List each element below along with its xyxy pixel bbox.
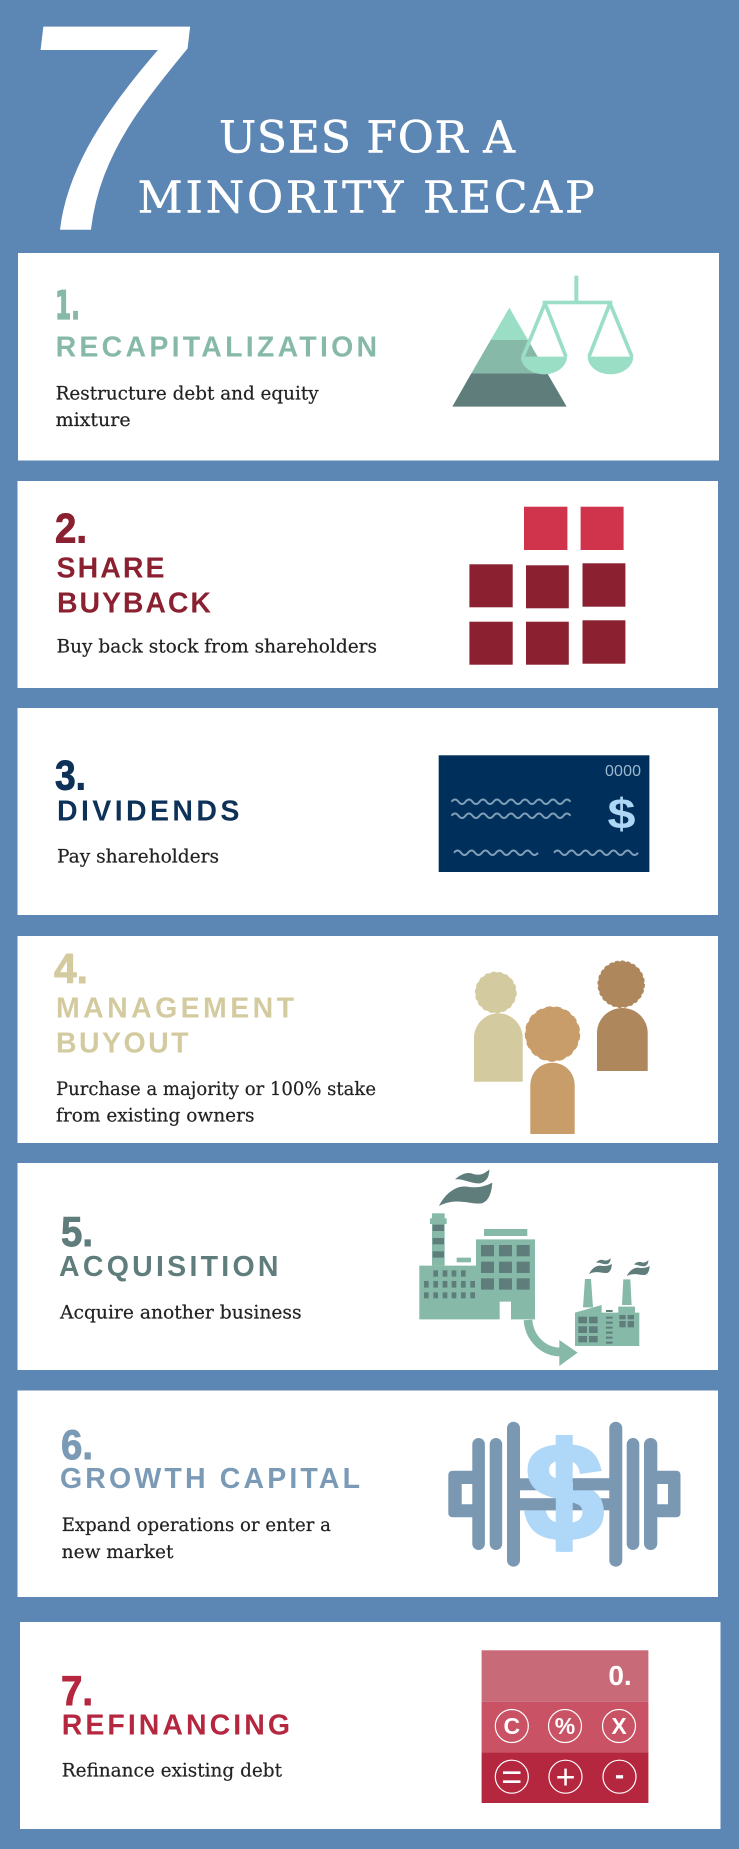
heading — [56, 552, 211, 620]
description: Acquire another business — [59, 1302, 302, 1323]
description: Refinance existing debt — [62, 1761, 283, 1782]
heading: BUYOUT — [56, 1028, 189, 1060]
icon: calculator: - — [615, 1759, 624, 1790]
icon: cheque: $ — [608, 790, 636, 838]
icon: calculator: X — [611, 1713, 627, 1739]
heading — [56, 993, 295, 1060]
description: Restructure debt and equity — [56, 383, 319, 404]
title block — [0, 0, 595, 292]
icon: cheque: 0000 — [605, 763, 641, 780]
heading: BUYBACK — [57, 588, 211, 620]
number 5: 5. — [61, 1208, 93, 1255]
icon: calculator — [482, 1650, 648, 1803]
title line 1: USES FOR A — [219, 112, 516, 163]
heading: ACQUISITION — [59, 1251, 278, 1283]
icon: pyramid and balance scale — [452, 276, 633, 407]
number 6: 6. — [61, 1421, 93, 1468]
description: Purchase a majority or 100% stake — [56, 1079, 376, 1100]
icon: calculator: + — [556, 1759, 575, 1797]
icon: cheque — [439, 755, 649, 872]
description: Expand operations or enter a — [62, 1515, 331, 1536]
icon: share blocks — [469, 507, 625, 665]
icon: calculator: = — [501, 1756, 522, 1797]
icon: calculator: C — [503, 1713, 520, 1739]
number 2: 2. — [55, 505, 87, 552]
description: Pay shareholders — [57, 847, 219, 868]
panel 2: share buyback — [18, 481, 718, 688]
heading: RECAPITALIZATION — [56, 332, 377, 364]
heading: REFINANCING — [62, 1709, 290, 1741]
panel 6: growth capital — [18, 1390, 718, 1597]
icon: three people — [474, 961, 648, 1134]
panel 1: recapitalization — [18, 253, 719, 460]
heading: DIVIDENDS — [57, 796, 239, 828]
heading: MANAGEMENT — [56, 993, 295, 1025]
number 7: 7. — [61, 1667, 93, 1714]
panel 5: acquisition — [18, 1163, 718, 1370]
description — [62, 1515, 331, 1563]
description: Buy back stock from shareholders — [56, 637, 377, 658]
icon: calculator: % — [555, 1713, 575, 1739]
icon: dumbbell with dollar sign: $ — [524, 1416, 604, 1570]
description: new market — [62, 1542, 174, 1563]
heading: SHARE — [56, 552, 164, 584]
description — [56, 1079, 376, 1127]
number 1: 1. — [55, 283, 80, 329]
panel 4: management buyout — [18, 936, 718, 1143]
title line 2: MINORITY RECAP — [138, 173, 595, 224]
icon: dumbbell with dollar sign — [448, 1416, 680, 1570]
icon: large factory, arrow and small factory — [419, 1169, 650, 1366]
heading: GROWTH CAPITAL — [60, 1463, 360, 1495]
number 4: 4. — [54, 945, 88, 992]
icon: calculator: 0. — [608, 1660, 632, 1691]
description: mixture — [56, 410, 131, 431]
description — [56, 383, 319, 431]
number 3: 3. — [55, 751, 86, 798]
panel 7: refinancing — [20, 1622, 720, 1829]
description: from existing owners — [56, 1106, 254, 1127]
panel 3: dividends — [18, 708, 718, 915]
